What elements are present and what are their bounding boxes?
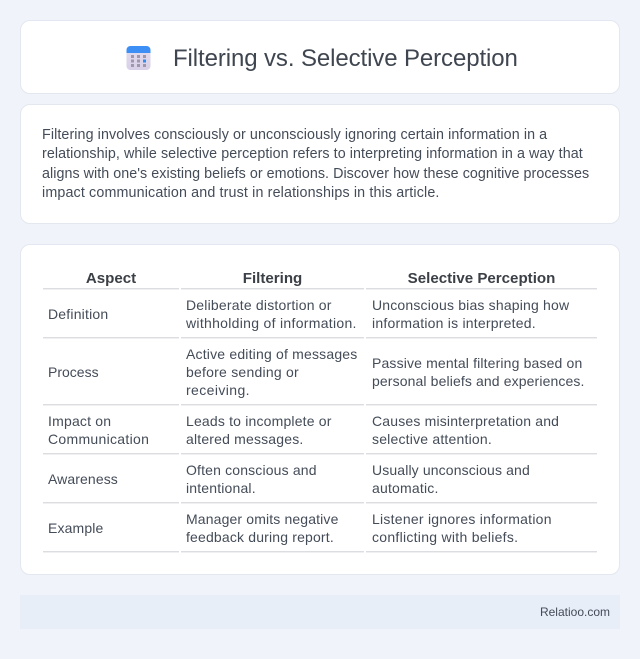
cell: Example selective perception: conflicting with beliefs.: [372, 529, 518, 545]
title panel: [20, 20, 620, 94]
cell: Awareness selective perception: automatic.: [372, 480, 439, 496]
cell: Definition filtering: withholding of information.: [186, 315, 357, 331]
cell: Process filtering: receiving.: [186, 382, 250, 398]
row: Awareness: Awareness: [48, 471, 118, 487]
cell: Definition selective perception: [372, 297, 570, 331]
cell: Awareness selective perception: Usually unconscious and: [372, 462, 530, 478]
cell: Impact filtering: Leads to incomplete or: [186, 413, 332, 429]
row: Impact on Communication: Communication: [48, 431, 149, 447]
cell: Example filtering: Manager omits negative: [186, 511, 338, 527]
row: Impact on Communication: Impact on: [48, 413, 111, 429]
cell: Definition selective perception: Unconscious bias shaping how: [372, 297, 569, 313]
cell: Example filtering: feedback during report.: [186, 529, 334, 545]
cell: Impact selective perception: Causes misinterpretation and: [372, 413, 559, 429]
cell: Impact selective perception: [372, 413, 559, 447]
cell: Definition filtering: Deliberate distortion or: [186, 297, 332, 313]
intro text: Filtering involves consciously or unconsciously ignoring certain information in a: [42, 127, 547, 143]
cell: Impact filtering: altered messages.: [186, 431, 303, 447]
row: Definition: Definition: [48, 306, 108, 322]
cell: Process filtering: [186, 346, 357, 398]
header: Aspect: Aspect: [86, 270, 136, 287]
cell: Process selective perception: personal beliefs and experiences.: [372, 373, 585, 389]
icon: calendar: [126, 46, 150, 70]
cell: Definition selective perception: information is interpreted.: [372, 315, 536, 331]
table panel: [20, 244, 620, 575]
cell: Awareness filtering: Often conscious and: [186, 462, 317, 478]
intro text: [42, 127, 589, 201]
title: Filtering vs. Selective Perception: [173, 45, 518, 72]
intro text: relationship, while selective perception refers to interpreting information in a way that: [42, 146, 583, 162]
table: [43, 270, 597, 553]
cell: Awareness selective perception: [372, 462, 530, 496]
header: Selective Perception: Selective Perception: [408, 270, 555, 287]
cell: Process filtering: Active editing of messages: [186, 346, 357, 362]
footer bar: [20, 595, 620, 629]
intro text: aligns with one's existing beliefs or emotions. Discover how these cognitive processes: [42, 166, 589, 182]
cell: Example selective perception: [372, 511, 552, 545]
row: Process: Process: [48, 364, 99, 380]
cell: Process selective perception: Passive mental filtering based on: [372, 355, 582, 371]
row: Example: Example: [48, 520, 103, 536]
cell: Process selective perception: [372, 355, 585, 389]
intro text: impact communication and trust in relationships in this article.: [42, 185, 440, 201]
cell: Example filtering: [186, 511, 338, 545]
cell: Definition filtering: [186, 297, 357, 331]
header: Filtering: Filtering: [243, 270, 302, 287]
cell: Impact selective perception: selective attention.: [372, 431, 492, 447]
cell: Awareness filtering: intentional.: [186, 480, 256, 496]
row: Impact on Communication: [48, 413, 149, 447]
footer text: Relatioo.com: [540, 605, 610, 619]
cell: Example selective perception: Listener ignores information: [372, 511, 552, 527]
intro panel: [20, 104, 620, 224]
cell: Impact filtering: [186, 413, 332, 447]
cell: Process filtering: before sending or: [186, 364, 299, 380]
cell: Awareness filtering: [186, 462, 317, 496]
